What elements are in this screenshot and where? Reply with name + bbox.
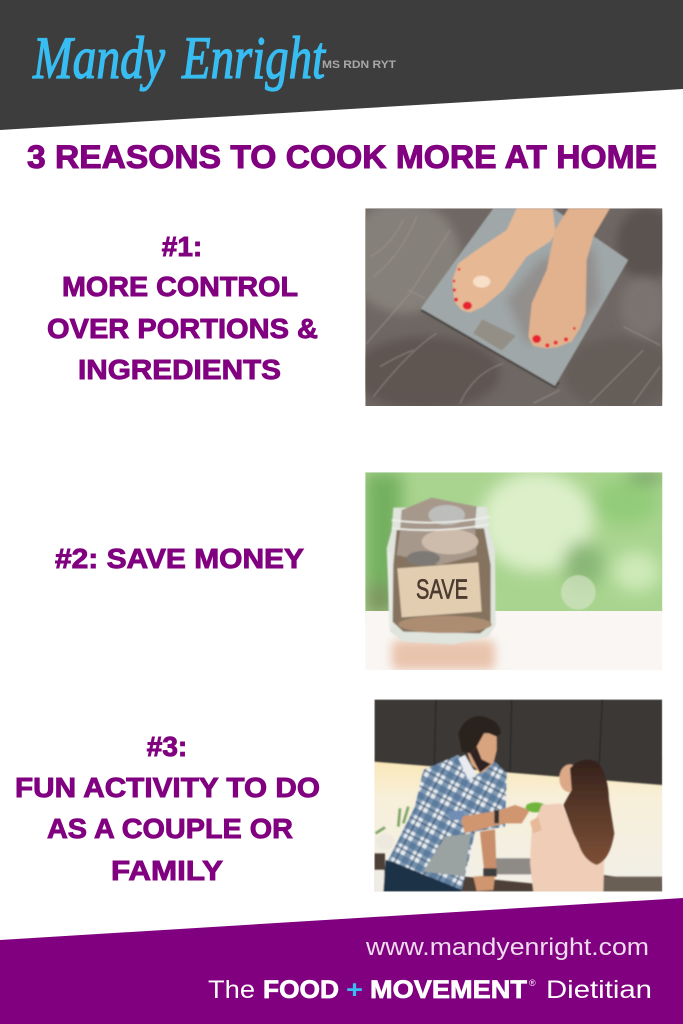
photo: feet on a bathroom scale: [365, 208, 662, 406]
header band: [0, 0, 683, 130]
reason 1 text: INGREDIENTS: [78, 354, 281, 385]
tagline: FOOD: [263, 976, 339, 1004]
tagline: MOVEMENT: [370, 976, 527, 1004]
woman hair: [563, 759, 614, 865]
logo: Mandy Enright: Mandy: [32, 25, 165, 91]
photo: jar of coins labelled save: [365, 471, 667, 670]
man shirt: [388, 755, 507, 890]
label: [397, 562, 482, 617]
man arms: [460, 805, 530, 833]
reason 3 text: #3:: [147, 731, 187, 762]
reason 3 text: [15, 731, 320, 886]
counter: [374, 853, 662, 892]
right foot: [528, 208, 610, 348]
scale display: [473, 319, 516, 351]
tagline: [208, 976, 652, 1004]
reason 1 text: MORE CONTROL: [62, 271, 298, 302]
photo: couple in a kitchen: [374, 699, 662, 892]
reason 1 text: [47, 231, 318, 385]
tagline: +: [346, 976, 363, 1004]
reason 3 text: AS A COUPLE OR: [47, 813, 293, 844]
scale: [420, 308, 560, 388]
cabinets: [374, 699, 662, 785]
logo: Mandy Enright: [32, 25, 326, 91]
reason 1 text: #1:: [162, 231, 202, 262]
man head: [467, 733, 497, 773]
tagline: ®: [529, 978, 536, 988]
reason 1 text: OVER PORTIONS &: [47, 313, 318, 344]
left foot: [452, 208, 556, 313]
jar: [387, 507, 496, 644]
title: 3 REASONS TO COOK MORE AT HOME: [27, 139, 657, 175]
label word: SAVE: [416, 573, 468, 604]
nails: [453, 268, 576, 347]
woman head: [558, 763, 574, 793]
reason 3 text: FUN ACTIVITY TO DO: [15, 772, 320, 803]
website: www.mandyenright.com: [365, 934, 649, 961]
woman top: [530, 803, 604, 892]
basil: [526, 802, 546, 812]
footer band: [0, 898, 683, 1024]
tagline: Dietitian: [546, 976, 652, 1004]
man t-shirt: [423, 833, 471, 877]
credentials: MS RDN RYT: [322, 59, 396, 71]
logo: Mandy Enright: Enright: [181, 25, 326, 91]
reason 2 text: #2: SAVE MONEY: [55, 543, 304, 574]
reason 3 text: FAMILY: [111, 855, 223, 886]
tagline: The: [208, 976, 255, 1004]
man jeans: [383, 860, 462, 892]
